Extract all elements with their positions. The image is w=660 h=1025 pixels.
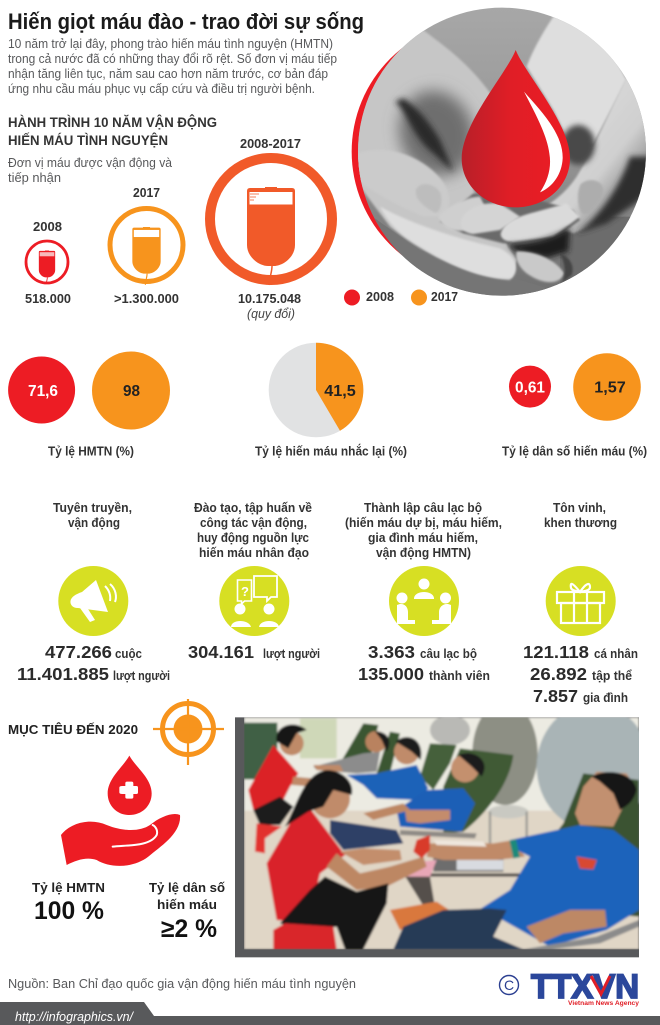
column: clubs: Thành lập câu lạc bộ <box>364 501 482 515</box>
column: training: công tác vận động, <box>200 516 307 530</box>
heading: goals to 2020: MỤC TIÊU ĐẾN 2020 <box>8 722 138 737</box>
stat: HMTN rate: 71,6 <box>28 383 58 400</box>
stat: HMTN rate: 98 <box>123 383 140 400</box>
left thumb <box>358 152 444 188</box>
blood bag 2008-2017: (quy đổi) <box>247 307 295 321</box>
column: honours <box>523 501 638 706</box>
blood bag 2008-2017: 10.175.048 <box>238 292 301 306</box>
legend: 2008 <box>366 290 394 304</box>
intro text block <box>8 36 337 96</box>
column: propaganda: 477.266 <box>45 642 112 662</box>
left palm lower <box>380 207 516 279</box>
goal: population rate: ≥2 % <box>161 915 217 943</box>
logo: TTXVN: C <box>504 977 514 993</box>
column: training <box>188 501 320 662</box>
goal: population rate: Tỷ lệ dân số <box>149 880 225 895</box>
intro text block: ứng nhu cầu máu phục vụ cấp cứu và điều trị người bệnh. <box>8 81 315 96</box>
column: propaganda: cuộc <box>115 647 142 661</box>
column: clubs: gia đình máu hiếm, <box>368 531 478 545</box>
stat: HMTN rate <box>8 352 170 458</box>
left hand mass <box>350 20 517 280</box>
column: propaganda: 11.401.885 <box>17 664 109 684</box>
column: propaganda <box>17 501 170 684</box>
column: training: Đào tạo, tập huấn về <box>194 501 312 515</box>
column: honours: gia đình <box>583 691 628 705</box>
stat: repeat donation pie <box>255 343 407 458</box>
column: training: 304.161 <box>188 642 254 662</box>
goal: population rate: hiến máu <box>157 897 217 912</box>
front donor <box>427 840 525 860</box>
section heading <box>8 113 217 148</box>
blood bag 2008 <box>25 220 71 306</box>
column: training: huy động nguồn lực <box>197 531 309 545</box>
stat: repeat donation pie: 41,5 <box>324 383 356 400</box>
column: clubs <box>345 501 502 684</box>
photo: blood donors <box>235 702 650 957</box>
icon: target <box>153 699 224 765</box>
icon: people at a table <box>396 578 451 624</box>
icon: two people talking <box>231 576 279 627</box>
logo: TTXVN: TTXVN <box>531 968 639 1006</box>
blood drop <box>462 50 570 207</box>
intro text block: 10 năm trở lại đây, phong trào hiến máu tình nguyện (HMTN) <box>8 36 333 51</box>
goal: HMTN rate: 100 % <box>34 897 104 925</box>
column: honours: tập thể <box>592 669 632 683</box>
column: clubs: thành viên <box>429 669 490 683</box>
goal: HMTN rate: Tỷ lệ HMTN <box>32 880 105 895</box>
icon: two people talking: ? <box>241 584 249 599</box>
column: honours: 26.892 <box>530 664 587 684</box>
tray and tubes <box>400 830 477 838</box>
intro text block: trong cả nước đã có những thay đổi rõ rệt. Số đơn vị máu tiếp <box>8 51 337 66</box>
stat: population donating <box>502 353 647 458</box>
blood bag 2008-2017: 2008-2017 <box>240 137 301 151</box>
right hand mass <box>527 17 627 143</box>
illustration: hands holding a blood drop <box>352 8 646 296</box>
stat: HMTN rate: Tỷ lệ HMTN (%) <box>48 444 134 458</box>
back donors <box>313 752 380 773</box>
stat: population donating: Tỷ lệ dân số hiến máu (%) <box>502 444 647 458</box>
blood bag 2008-2017 <box>210 137 332 321</box>
section subheading: Đơn vị máu được vận động và <box>8 155 173 170</box>
column: honours: Tôn vinh, <box>553 501 606 515</box>
fingers <box>439 197 490 231</box>
column: clubs: 3.363 <box>368 642 415 662</box>
column: honours: 7.857 <box>533 686 578 706</box>
intro text block: nhận tăng liên tục, năm sau cao hơn năm trước, cơ bản đáp <box>8 66 328 81</box>
column: clubs: câu lạc bộ <box>420 647 477 661</box>
column: propaganda: Tuyên truyền, <box>53 501 132 515</box>
column: propaganda: vận động <box>68 516 120 530</box>
title: Hiến giọt máu đào - trao đời sự sống <box>8 9 364 34</box>
column: clubs: 135.000 <box>358 664 424 684</box>
section heading: HÀNH TRÌNH 10 NĂM VẬN ĐỘNG <box>8 113 217 130</box>
icon: megaphone <box>70 580 116 622</box>
section subheading <box>8 155 173 185</box>
section heading: HIẾN MÁU TÌNH NGUYỆN <box>8 131 168 148</box>
blood bag 2017: 2017 <box>133 186 160 200</box>
stat: population donating: 0,61 <box>515 380 545 396</box>
standing nurse <box>248 745 298 810</box>
blood bag 2017 <box>110 186 183 306</box>
source: Nguồn: Ban Chỉ đạo quốc gia vận động hiến máu tình nguyện <box>8 976 356 991</box>
icon: gift box <box>557 584 604 623</box>
legend <box>344 290 458 306</box>
column: training: lượt người <box>263 647 320 661</box>
stat: repeat donation pie: Tỷ lệ hiến máu nhắc lại (%) <box>255 444 407 458</box>
stat: population donating: 1,57 <box>594 380 626 396</box>
goal: HMTN rate <box>32 880 105 925</box>
blood bag 2017: >1.300.000 <box>114 292 179 306</box>
column: honours: 121.118 <box>523 642 589 662</box>
goal: population rate <box>149 880 225 943</box>
logo: TTXVN: Vietnam News Agency <box>568 1000 639 1007</box>
column: training: hiến máu nhân đạo <box>199 546 309 560</box>
footer bar: http://infographics.vn/ <box>15 1010 135 1024</box>
blood bag 2008: 2008 <box>33 220 62 234</box>
column: honours: cá nhân <box>594 647 638 661</box>
column: clubs: (hiến máu dự bị, máu hiếm, <box>345 516 502 530</box>
legend: 2017 <box>431 290 458 304</box>
chairs <box>340 723 378 763</box>
column: honours: khen thương <box>544 516 617 530</box>
section subheading: tiếp nhận <box>8 170 61 185</box>
column: propaganda: lượt người <box>113 669 170 683</box>
front nurse <box>267 808 345 923</box>
blood bag 2008: 518.000 <box>25 292 71 306</box>
footer bar <box>0 1002 660 1025</box>
finger shadows <box>440 193 580 243</box>
icon: hand holding blood drop <box>61 756 180 866</box>
column: clubs: vận động HMTN) <box>376 546 471 560</box>
